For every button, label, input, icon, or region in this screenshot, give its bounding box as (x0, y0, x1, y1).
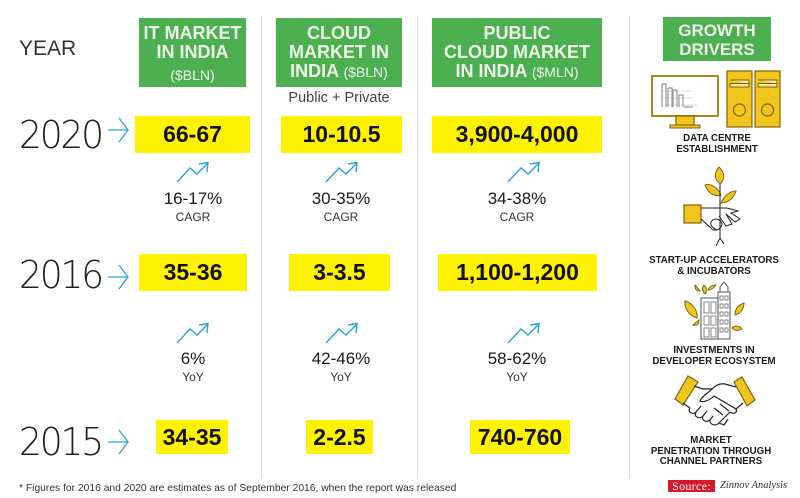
value: IT market 2015 (156, 420, 228, 454)
arrow: 2020 (108, 118, 129, 142)
value: IT market 2020 (135, 116, 250, 153)
year label: 2020: 2020 (19, 113, 102, 157)
arrow: 2015 (108, 430, 129, 454)
label: start-up accelerators (649, 255, 779, 276)
trend icon: public YoY (508, 322, 540, 344)
label: investments in developer ecosystem (652, 345, 776, 366)
source badge: Source: (672, 479, 711, 493)
value: public cloud 2020 (432, 116, 602, 153)
footnote: * Figures for 2016 and 2020 are estimates as of September 2016, when the report was released (19, 483, 456, 494)
value: cloud market 2016 (289, 254, 390, 291)
growth rate: cloud YoY: YoY (330, 370, 352, 384)
growth rate: cloud CAGR (312, 189, 370, 224)
heading: growth drivers (663, 17, 771, 61)
value: IT market 2020: 66-67 (163, 121, 222, 147)
heading: public cloud market in India: PUBLIC (484, 23, 550, 43)
value: public cloud 2015 (470, 420, 570, 454)
trend icon: public CAGR (508, 162, 540, 182)
label: start-up accelerators: & INCUBATORS (677, 266, 751, 276)
heading: year: YEAR (19, 37, 76, 60)
text: public + private: Public + Private (288, 90, 390, 106)
value: IT market 2015: 34-35 (163, 424, 221, 450)
label: market penetration: PENETRATION THROUGH (651, 446, 771, 456)
heading: growth drivers: GROWTH (678, 21, 756, 40)
heading: cloud market in India (276, 18, 402, 87)
value: cloud market 2015 (306, 420, 373, 454)
growth rate: public CAGR: CAGR (500, 210, 534, 224)
value: cloud market 2015: 2-2.5 (313, 424, 366, 450)
value: public cloud 2015: 740-760 (478, 424, 562, 450)
heading: public cloud market in India: IN INDIA ($MLN) (455, 61, 578, 81)
source name: Zinnov Analysis (720, 480, 787, 491)
heading: cloud market in India: MARKET IN (289, 42, 389, 62)
heading: IT market in India: IN INDIA (156, 42, 228, 62)
growth rate: IT YoY (181, 349, 205, 384)
label: data centre establishment: ESTABLISHMENT (676, 144, 758, 154)
icon: data centre (651, 70, 781, 128)
heading: growth drivers: DRIVERS (679, 40, 755, 59)
icon: plant in hand (683, 166, 741, 246)
source credit (668, 479, 787, 493)
heading: public cloud market in India (432, 18, 602, 87)
heading: public cloud market in India: CLOUD MARKET (444, 42, 590, 62)
icon: buildings and leaves (684, 281, 744, 340)
heading: IT market in India: ($BLN) (170, 67, 215, 83)
growth rate: IT YoY: 6% (181, 349, 205, 368)
label: market penetration: CHANNEL PARTNERS (660, 456, 762, 467)
label: market penetration (651, 435, 771, 467)
value: IT market 2016: 35-36 (164, 259, 222, 285)
growth rate: public YoY: 58-62% (488, 349, 546, 368)
label: start-up accelerators: START-UP ACCELERATORS (649, 255, 779, 266)
growth rate: IT CAGR: 16-17% (164, 189, 222, 208)
heading: IT market in India: IT MARKET (144, 23, 242, 43)
growth rate: cloud CAGR: CAGR (324, 210, 358, 224)
label: market penetration: MARKET (690, 435, 732, 446)
label: data centre establishment (676, 133, 758, 154)
heading: IT market in India (139, 18, 246, 87)
label: investments in developer ecosystem: DEVELOPER ECOSYSTEM (652, 356, 776, 366)
growth rate: public YoY: YoY (506, 370, 528, 384)
trend icon: cloud CAGR (326, 162, 358, 182)
value: public cloud 2020: 3,900-4,000 (456, 121, 578, 147)
value: cloud market 2016: 3-3.5 (313, 259, 366, 285)
arrow: 2016 (108, 264, 129, 290)
growth rate: cloud YoY: 42-46% (312, 349, 370, 368)
growth rate: cloud CAGR: 30-35% (312, 189, 370, 208)
growth rate: IT CAGR (164, 189, 222, 224)
heading: cloud market in India: CLOUD (307, 23, 371, 43)
label: data centre establishment: DATA CENTRE (683, 133, 751, 144)
growth rate: IT YoY: YoY (182, 370, 204, 384)
value: cloud market 2020 (281, 116, 402, 153)
value: IT market 2016 (139, 254, 247, 291)
value: cloud market 2020: 10-10.5 (302, 121, 380, 147)
icon: handshake (674, 375, 756, 426)
label: investments in developer ecosystem: INVESTMENTS IN (673, 345, 755, 356)
year label: 2015: 2015 (19, 420, 102, 464)
year label: 2016: 2016 (19, 253, 102, 297)
growth rate: public CAGR: 34-38% (488, 189, 546, 208)
trend icon: IT CAGR (176, 162, 209, 182)
growth rate: public YoY (488, 349, 546, 384)
value: public cloud 2016: 1,100-1,200 (456, 259, 579, 285)
growth rate: public CAGR (488, 189, 546, 224)
trend icon: IT YoY (176, 322, 209, 344)
growth rate: IT CAGR: CAGR (176, 210, 210, 224)
trend icon: cloud YoY (326, 322, 358, 344)
heading: cloud market in India: INDIA ($BLN) (290, 61, 388, 81)
value: public cloud 2016 (438, 254, 597, 291)
growth rate: cloud YoY (312, 349, 370, 384)
